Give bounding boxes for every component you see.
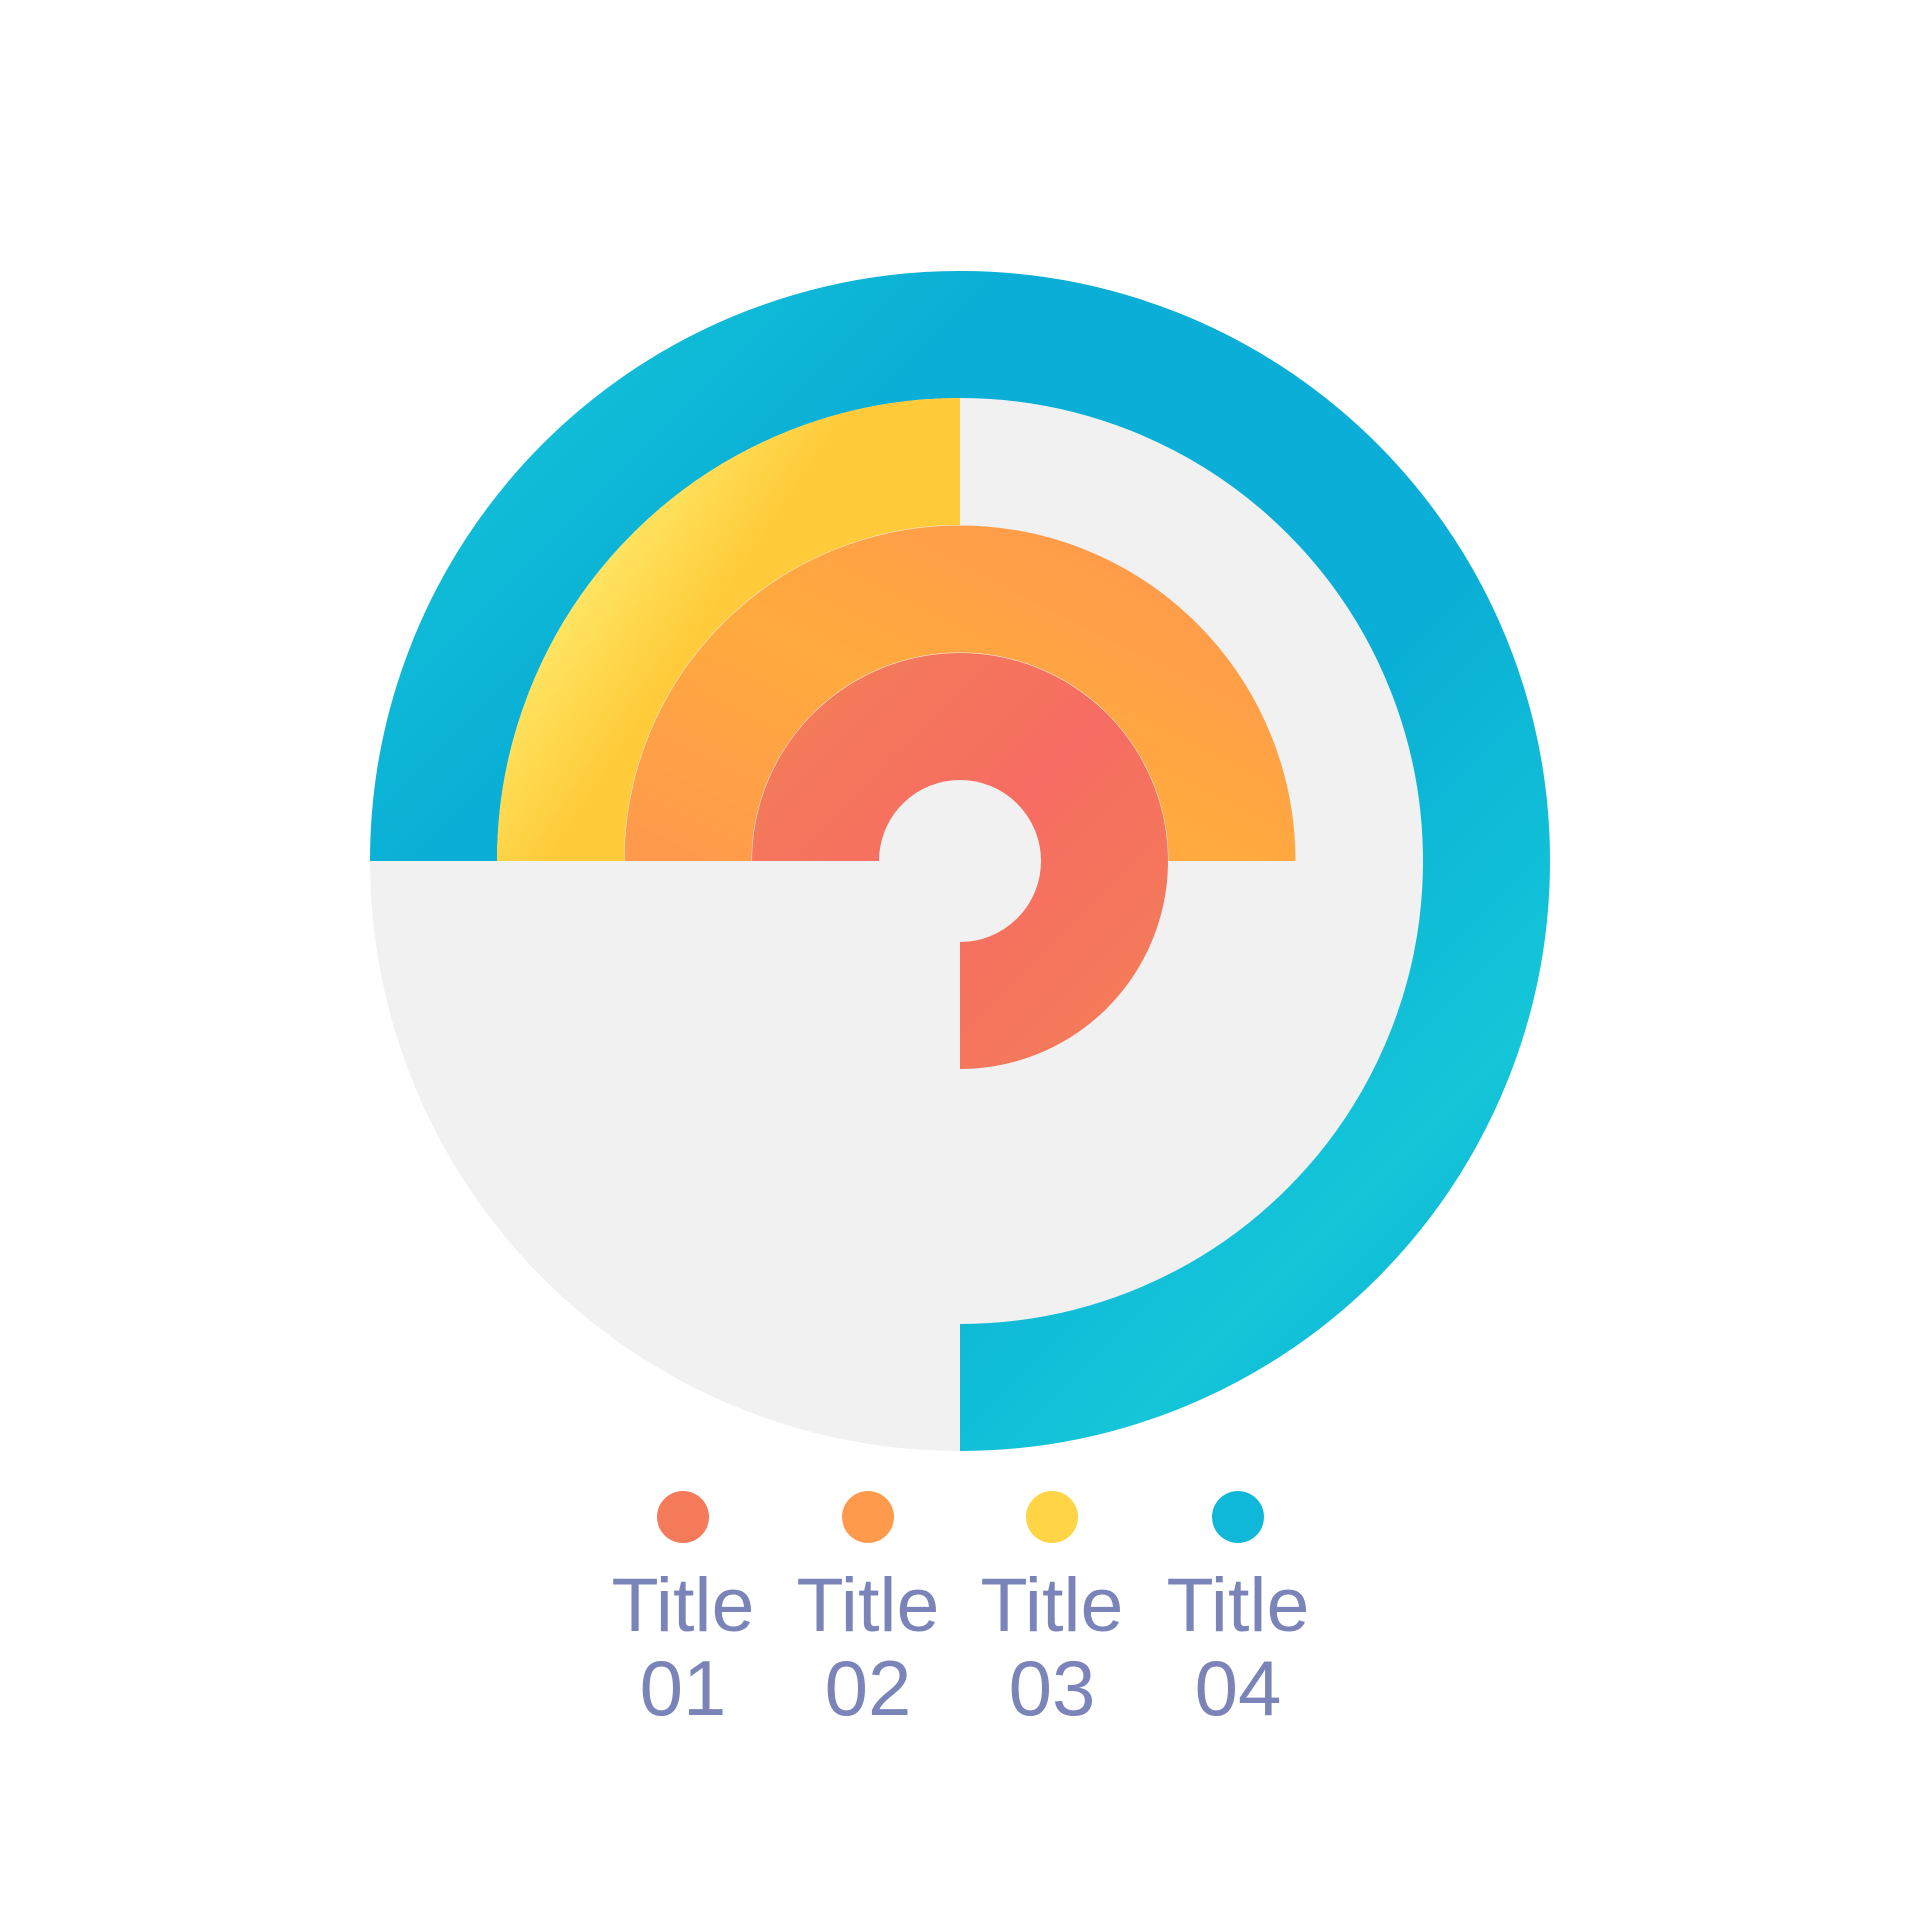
legend item 03: 03	[1009, 1644, 1095, 1732]
legend item 01: Title	[612, 1563, 754, 1648]
legend item 03: Title	[980, 1563, 1124, 1648]
legend item 02: Title	[796, 1563, 940, 1648]
legend item 04: Title	[1166, 1563, 1310, 1648]
legend item 01	[612, 1491, 754, 1732]
legend item 02: 02	[825, 1644, 911, 1732]
background disc	[370, 271, 1550, 1451]
legend item 01: 01	[640, 1644, 726, 1732]
chart: concentric radial bars	[370, 271, 1550, 1451]
arc: blue ring (Title 04)	[434, 334, 1486, 1387]
arc: yellow ring (Title 03)	[560, 462, 960, 861]
legend item 03	[980, 1491, 1124, 1732]
legend item 04	[1166, 1491, 1310, 1732]
legend item 04: 04	[1195, 1644, 1281, 1732]
legend	[612, 1491, 1310, 1732]
legend item 02	[796, 1491, 940, 1732]
arc: red ring (Title 01)	[816, 716, 1104, 1006]
arc: orange ring (Title 02)	[688, 589, 1232, 861]
